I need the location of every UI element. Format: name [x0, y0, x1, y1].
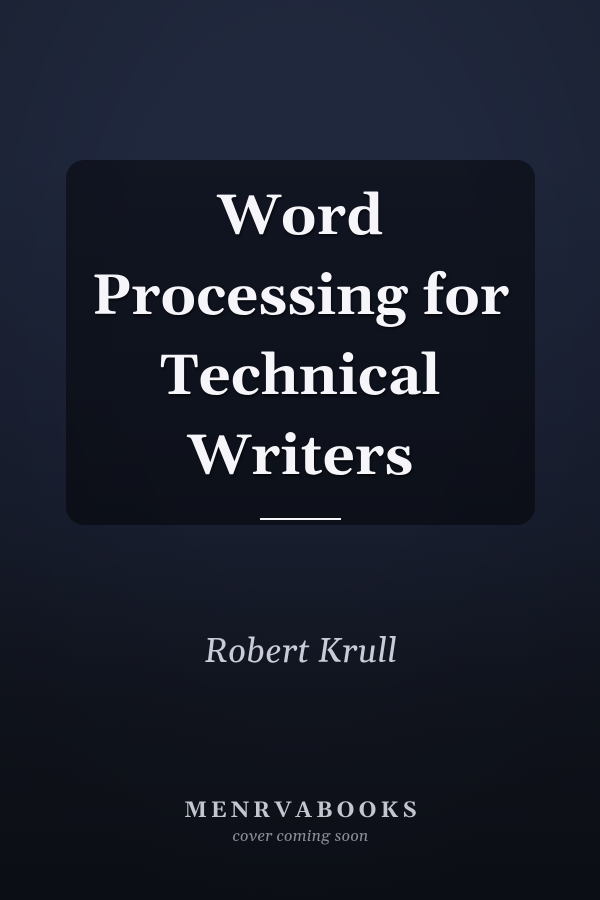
title: Writers — [188, 423, 413, 494]
panel: title backdrop — [66, 160, 535, 524]
author name: Robert Krull — [204, 630, 397, 674]
publisher name: MENRVABOOKS — [184, 797, 421, 825]
title — [92, 183, 510, 494]
title: Word — [218, 183, 383, 254]
cover note: cover coming soon — [233, 827, 368, 847]
title: Processing for — [92, 263, 509, 334]
title underline rule — [260, 518, 341, 520]
title: Technical — [160, 343, 441, 414]
